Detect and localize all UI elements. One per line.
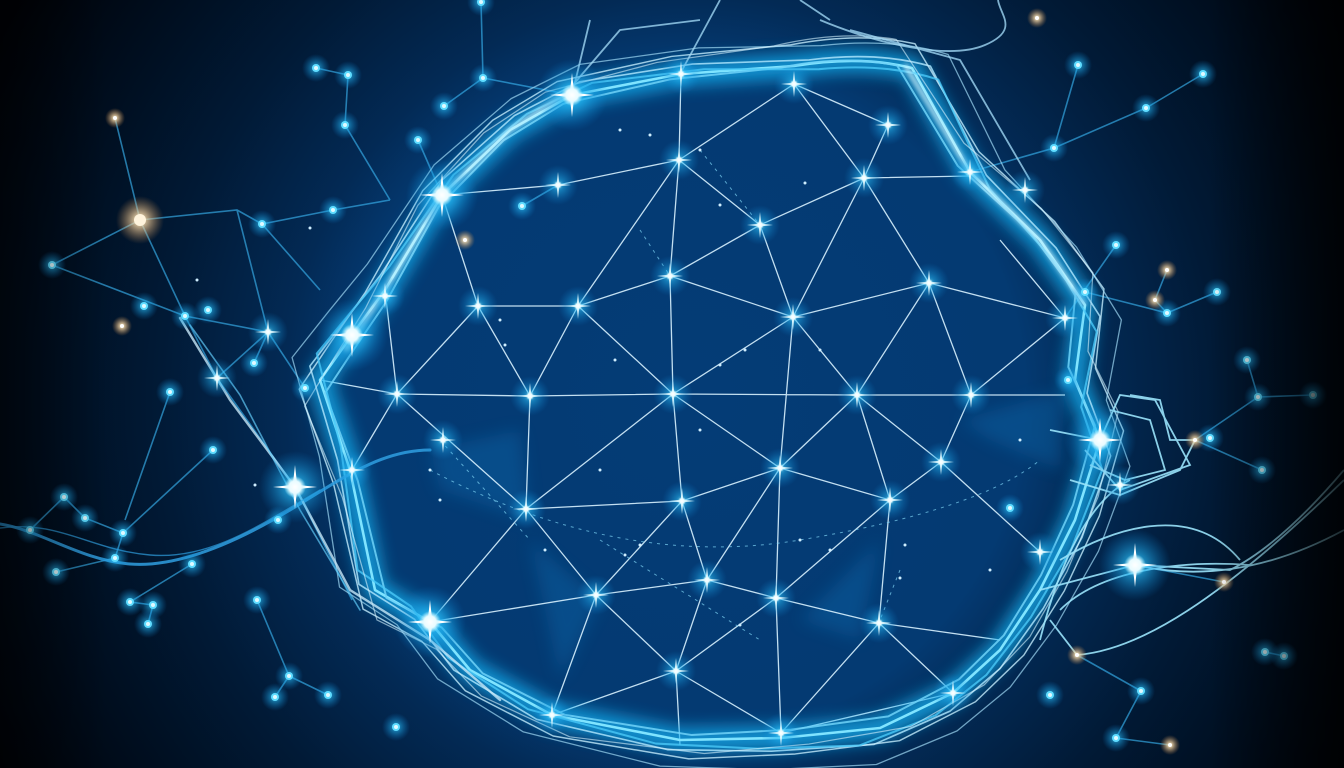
dashed inner lines: [430, 150, 1040, 640]
small star dust: [196, 128, 1022, 626]
glowing ring: blurred halo: [320, 61, 1100, 740]
glowing ring: bright strands: [272, 0, 1151, 768]
ring bright nodes: [197, 59, 1171, 658]
sphere network lines: [320, 74, 1065, 745]
sphere inner glow: [430, 390, 1065, 680]
left flowing strand: [0, 318, 500, 700]
sphere nodes: [377, 54, 1085, 753]
right tangle of strands: [1040, 395, 1344, 655]
